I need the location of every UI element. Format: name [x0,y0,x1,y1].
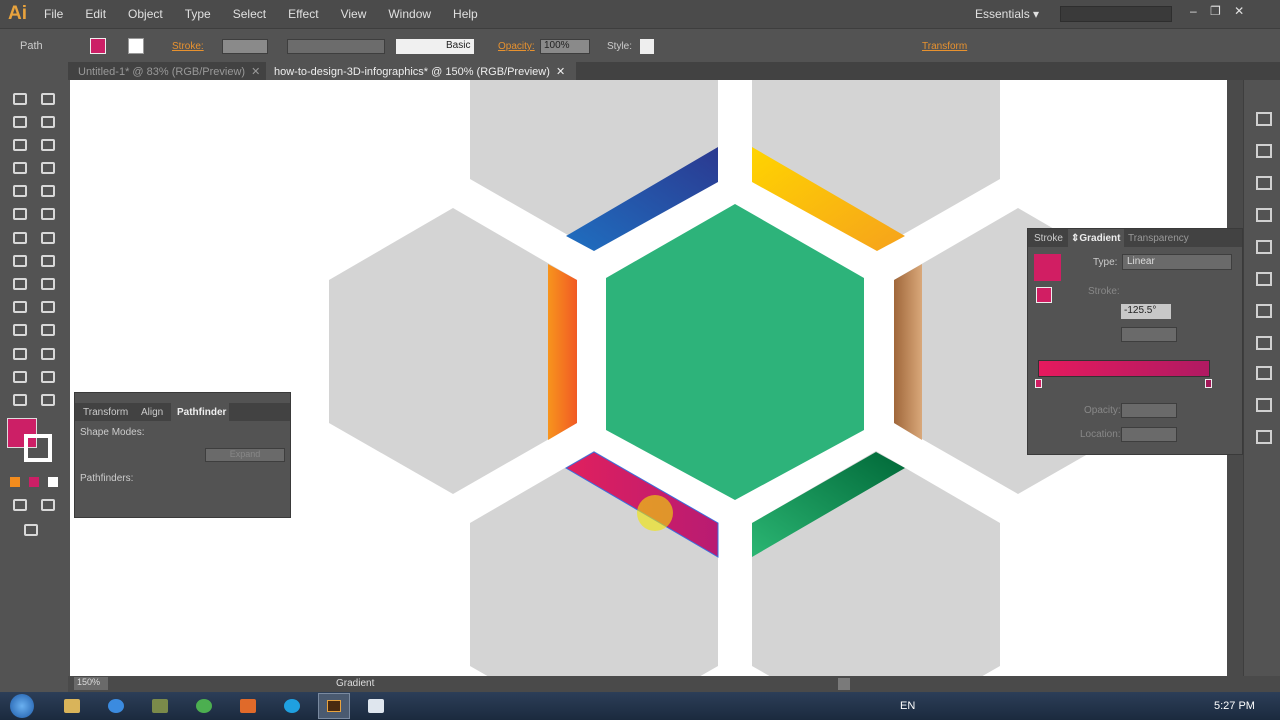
panel: gradient: Type: [1093,257,1117,268]
panel: gradient [1027,228,1243,455]
control bar: Stroke: [172,41,204,52]
control bar: Path [20,40,43,52]
Ai logo: Ai [8,3,27,24]
control bar: Style: [607,41,632,52]
strip: brown [894,264,922,440]
panel: pathfinder: Shape Modes: [80,427,144,438]
cursor highlight [637,495,673,531]
panel: gradient: Opacity: [1084,405,1121,416]
panel: gradient: Stroke: [1088,286,1120,297]
hexagon: top-right [752,0,1000,250]
control bar: Transform [922,41,967,52]
panel: pathfinder: Expand [230,449,260,459]
panel: gradient: Linear [1127,256,1155,267]
tab bar [68,62,1280,80]
panel: gradient: Stroke [1034,233,1063,244]
control bar: Opacity: [498,41,535,52]
right dock [1243,80,1280,676]
panel: pathfinder: Transform [83,407,128,418]
hexagon: top-left [470,0,718,250]
canvas and artwork [70,80,1227,676]
panel: pathfinder: Align [141,407,163,418]
status bar: Gradient [336,678,374,689]
right scrollbar [1227,80,1243,676]
hexagon: right [894,208,1142,494]
taskbar: EN [900,700,915,712]
tab bar: how-to-design-3D-infographics* @ 150% (RGB/Preview) ✕ [274,66,565,78]
status bar [68,676,1280,692]
left toolbar [0,62,68,692]
taskbar: 5:27 PM [1214,700,1255,712]
control bar: Basic [446,40,470,51]
panel: gradient: ⇕Gradient [1071,233,1120,244]
tab bar: Untitled-1* @ 83% (RGB/Preview) ✕ [78,66,260,78]
control bar [0,28,1280,62]
panel: gradient: Transparency [1128,233,1189,244]
strip: yellow [752,147,905,251]
panel: gradient: Location: [1080,429,1121,440]
strip: dark green [752,452,905,557]
hexagon: bottom-left [470,451,718,720]
hexagon: center green [606,204,864,500]
strip: pink selected [566,452,718,557]
taskbar [0,692,1280,720]
menu bar [0,0,1280,28]
status bar: 150% [77,677,100,687]
hexagon: bottom-right [752,451,1000,720]
panel: pathfinder: Pathfinder [177,407,226,418]
strip: orange [548,264,577,440]
menu bar: File Edit Object Type Select Effect View Window Help [44,7,478,21]
hexagon: left [329,208,577,494]
panel: pathfinder [74,392,291,518]
panel: pathfinder: Pathfinders: [80,473,133,484]
strip: blue [566,147,718,251]
menu bar: – ❐ ✕ [1190,4,1244,18]
menu bar: Essentials ▾ [975,7,1039,21]
control bar: 100% [544,40,570,51]
panel: gradient: -125.5° [1124,305,1156,316]
